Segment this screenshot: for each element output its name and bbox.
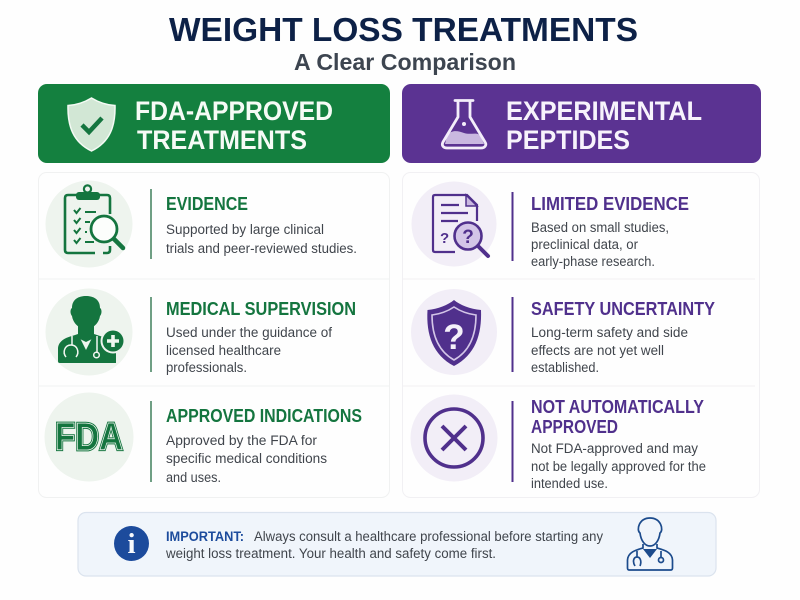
icon: FDA logo: FDA: [55, 416, 123, 459]
row: not automatically approved: [410, 394, 706, 491]
text: safety uncertainty: [531, 299, 715, 375]
row: evidence: [46, 180, 357, 268]
icon: flask: [442, 100, 486, 148]
icon: clipboard with magnifier: [46, 180, 132, 268]
icon: shield with question mark: [411, 289, 497, 375]
heading: experimental peptides: PEPTIDES: [506, 125, 630, 155]
icon: crossed circle: [410, 394, 498, 482]
text: approved indications: [166, 406, 362, 485]
text: limited evidence: LIMITED EVIDENCE: [531, 194, 689, 214]
icon: shield with check: [68, 98, 115, 151]
text: medical supervision: professionals.: [166, 360, 247, 375]
text: safety uncertainty: Long-term safety and side: [531, 325, 688, 340]
text: not automatically approved: [531, 397, 706, 491]
text: not automatically approved: not be legally approved for the: [531, 459, 706, 474]
text: approved indications: specific medical conditions: [166, 451, 327, 466]
text: evidence: EVIDENCE: [166, 194, 248, 214]
callout: important notice: [78, 512, 716, 576]
subtitle: A Clear Comparison: [294, 49, 516, 75]
text: evidence: trials and peer-reviewed studies.: [166, 241, 357, 256]
row: limited evidence: [412, 182, 689, 269]
heading: FDA-approved treatments: FDA-APPROVED: [135, 96, 333, 126]
row: safety uncertainty: [411, 289, 715, 375]
heading: FDA-approved treatments: [135, 96, 333, 155]
text: limited evidence: preclinical data, or: [531, 237, 638, 252]
icon: FDA logo: [44, 392, 134, 482]
text: limited evidence: [531, 194, 689, 269]
text: not automatically approved: intended use.: [531, 476, 608, 491]
row: medical supervision: [46, 288, 356, 376]
text: evidence: [166, 194, 357, 256]
icon: document with question magnifier: ?: [462, 227, 474, 248]
text: important message: Always consult a healthcare professional before starting any: [254, 529, 603, 544]
icon: document with question magnifier: ?: [440, 230, 449, 247]
panel: experimental peptides details: [402, 172, 760, 498]
text: not automatically approved: Not FDA-approved and may: [531, 441, 698, 456]
icon: FDA logo: FDA: [55, 416, 123, 459]
text: limited evidence: early-phase research.: [531, 254, 655, 269]
text: important message: [165, 529, 603, 561]
icon: doctor with plus: [46, 288, 132, 376]
text: safety uncertainty: effects are not yet well: [531, 343, 664, 358]
text: safety uncertainty: SAFETY UNCERTAINTY: [531, 299, 715, 319]
text: medical supervision: licensed healthcare: [166, 343, 281, 358]
icon: document with question magnifier: [412, 182, 496, 266]
icon: information: [114, 526, 149, 561]
panel: experimental peptides header: [402, 84, 761, 163]
heading: FDA-approved treatments: TREATMENTS: [137, 125, 307, 155]
text: not automatically approved: NOT AUTOMATICALLY: [531, 397, 704, 417]
panel: FDA-approved header: [38, 84, 390, 163]
text: approved indications: APPROVED INDICATIONS: [166, 406, 362, 426]
icon: doctor outline: [628, 518, 672, 570]
heading: experimental peptides: [506, 96, 702, 155]
text: evidence: Supported by large clinical: [166, 222, 324, 237]
text: approved indications: Approved by the FDA for: [166, 433, 318, 448]
text: approved indications: and uses.: [166, 470, 221, 485]
icon: information: i: [127, 528, 136, 560]
row: approved indications: [44, 392, 362, 485]
panel: FDA-approved details: [38, 172, 390, 498]
text: safety uncertainty: established.: [531, 360, 599, 375]
icon: shield with question mark: ?: [443, 318, 465, 357]
text: important message: IMPORTANT:: [166, 529, 244, 544]
text: not automatically approved: APPROVED: [531, 417, 618, 437]
text: important message: weight loss treatment. Your health and safety come first.: [165, 546, 496, 561]
text: medical supervision: [166, 299, 356, 375]
title: WEIGHT LOSS TREATMENTS: [169, 11, 638, 48]
text: medical supervision: Used under the guidance of: [166, 325, 332, 340]
text: limited evidence: Based on small studies,: [531, 220, 669, 235]
heading: experimental peptides: EXPERIMENTAL: [506, 96, 702, 126]
text: medical supervision: MEDICAL SUPERVISION: [166, 299, 356, 319]
